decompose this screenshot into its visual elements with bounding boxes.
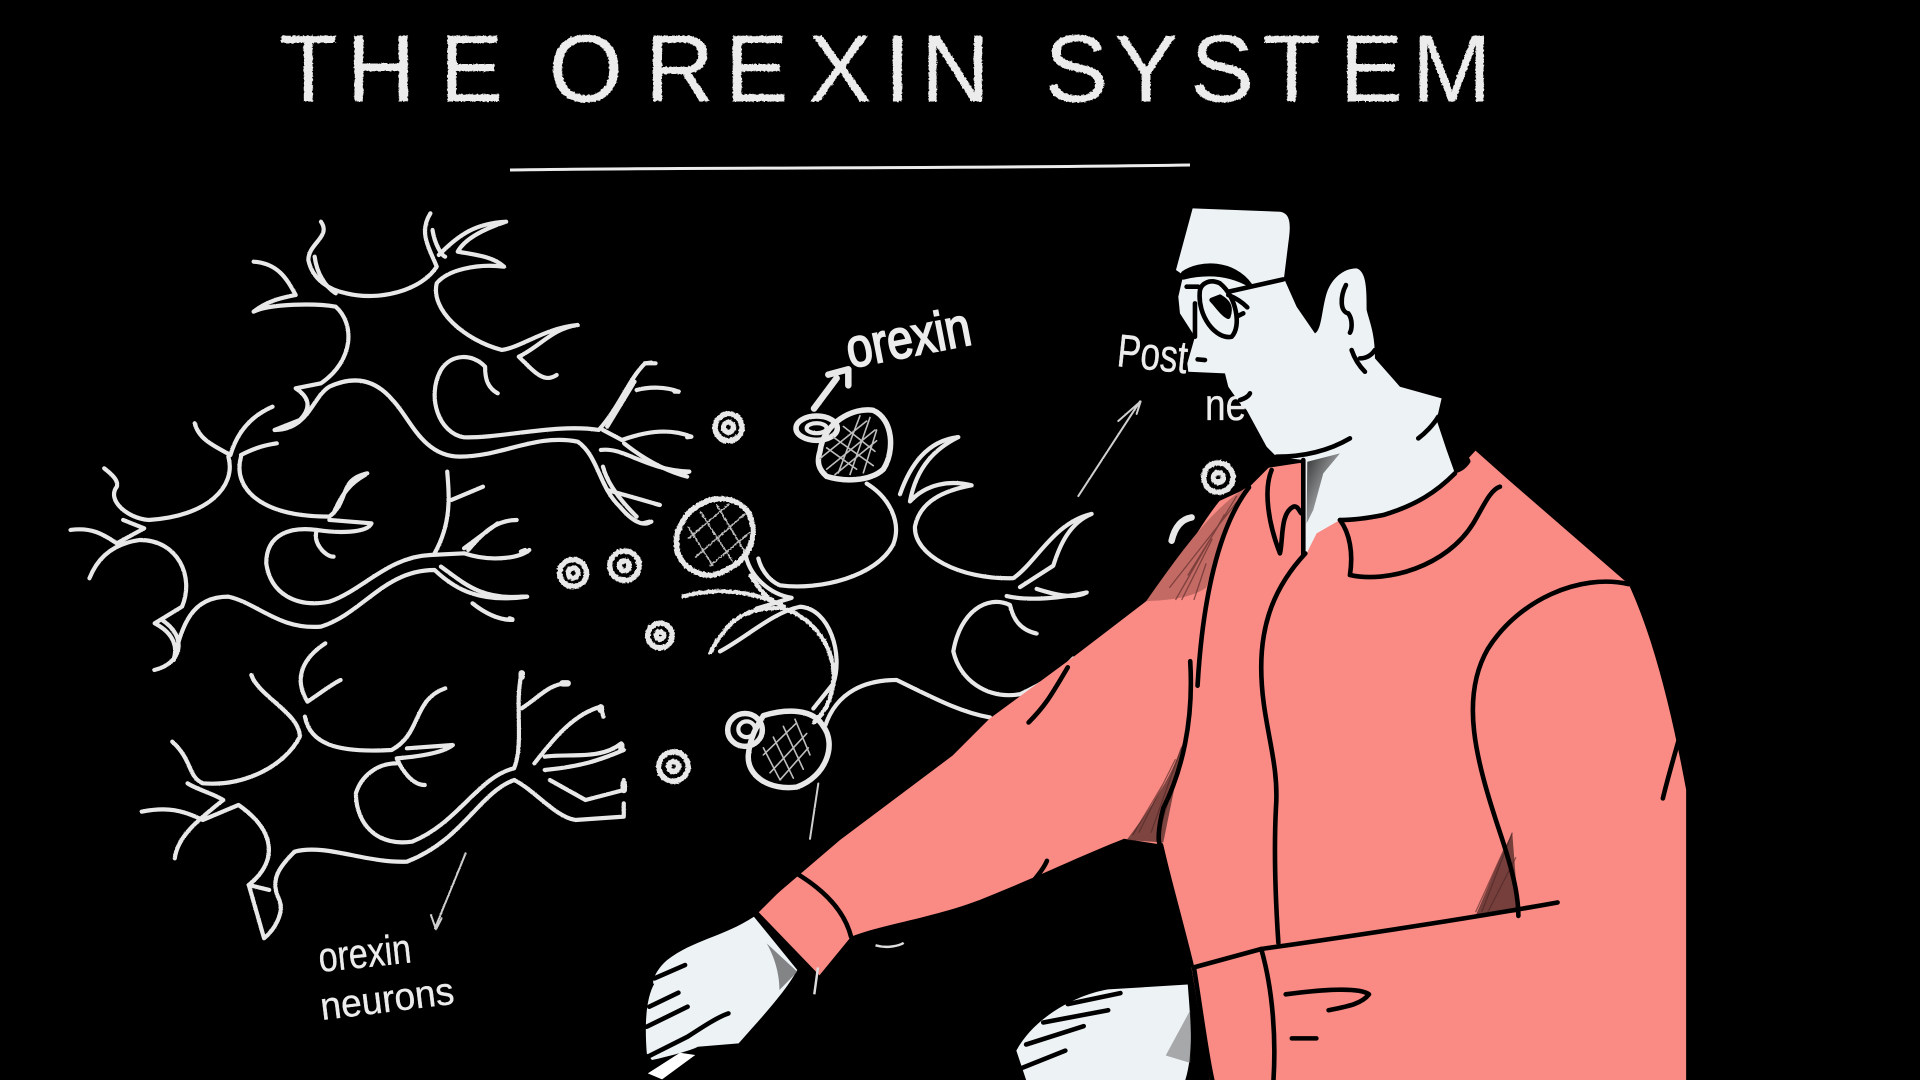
- front placket: [1261, 553, 1305, 943]
- label: post-synaptic second line: ne: [1205, 380, 1246, 430]
- cuff inner: [1261, 949, 1274, 1080]
- glasses: [1187, 279, 1283, 337]
- shoulder shading: [1146, 487, 1247, 601]
- arm lower wrinkle: [1035, 861, 1047, 879]
- jaw: [1277, 438, 1350, 457]
- dendrites: lower axon: [720, 607, 990, 726]
- label: orexin: orexin: [840, 295, 976, 380]
- shirt: [756, 451, 1686, 1080]
- label: orexin neurons: orexin: [316, 925, 413, 982]
- terminal knobs: [522, 673, 624, 790]
- left sleeve cuff: [756, 872, 851, 977]
- neuron cluster: top and middle orexin neurons: [71, 213, 691, 660]
- vesicle: by shoulder: [1172, 517, 1192, 541]
- shirt outlines: [756, 487, 1684, 1080]
- post-synaptic neuron: [720, 369, 1192, 839]
- waist shadow: [1476, 833, 1518, 916]
- right hand finger lines: [1022, 993, 1120, 1068]
- soma: top with orexin vesicle: [796, 410, 891, 480]
- collar left flap: [1267, 460, 1303, 555]
- armpit shadows: [1127, 735, 1185, 842]
- soma: bottom with vesicle: [728, 711, 829, 788]
- ear inner: [1342, 285, 1352, 333]
- neuron: bottom orexin neuron: [142, 620, 624, 938]
- label: orexin neurons: neurons: [318, 970, 457, 1029]
- neck crease: [1418, 417, 1438, 438]
- neuron: top: [254, 213, 691, 524]
- neuron: middle: [71, 407, 529, 660]
- face details: [1183, 266, 1500, 577]
- left hand: [646, 917, 797, 1079]
- collar right flap: [1340, 487, 1500, 577]
- forearm cuff seam: [1194, 902, 1558, 1080]
- collar inner dark: [1454, 453, 1471, 473]
- arrow: to orexin label: [814, 369, 848, 409]
- mouth: [1240, 393, 1250, 400]
- vesicles: [560, 414, 1233, 781]
- line: fading axon: [810, 784, 818, 839]
- dendrites: upper branches: [745, 437, 1092, 695]
- eyebrow: [1183, 266, 1250, 285]
- neck and face: [1176, 208, 1455, 557]
- nose nostril: [1198, 357, 1205, 362]
- terminal knobs: upper neurons: [510, 363, 691, 619]
- wrist shadow: [767, 943, 797, 990]
- right arm edge: [1663, 722, 1684, 798]
- label: post-synaptic: Post: [1115, 325, 1191, 383]
- soma: left middle: [560, 414, 1233, 781]
- person: [646, 208, 1686, 1080]
- sleeve shading: [1133, 496, 1516, 912]
- title underline: [510, 165, 1190, 170]
- hand finger lines: [647, 965, 728, 1057]
- dendrite: left of lower branch: [683, 576, 834, 722]
- eyelash: [1228, 295, 1247, 317]
- eye: [1212, 297, 1230, 317]
- cuff wrinkle: [1286, 990, 1369, 1038]
- right wrist shadow: [1166, 1010, 1190, 1063]
- arrow: to post-synaptic label: [1078, 401, 1141, 496]
- arrow: to orexin neurons: [431, 853, 466, 929]
- obscured label fragment: [814, 943, 904, 994]
- title: THEOREXINSYSTEM: [279, 17, 1491, 123]
- arm wrinkle: [1029, 667, 1068, 722]
- neck shadow: [1307, 453, 1340, 523]
- chalk stick: [648, 1053, 695, 1079]
- sleeve seam: [1473, 582, 1629, 916]
- ear lower: [1352, 350, 1375, 372]
- collar neck line: [1340, 473, 1455, 520]
- label: orexin neurons: [316, 925, 457, 1029]
- left side seam: [1159, 487, 1249, 965]
- right hand: [1016, 984, 1191, 1080]
